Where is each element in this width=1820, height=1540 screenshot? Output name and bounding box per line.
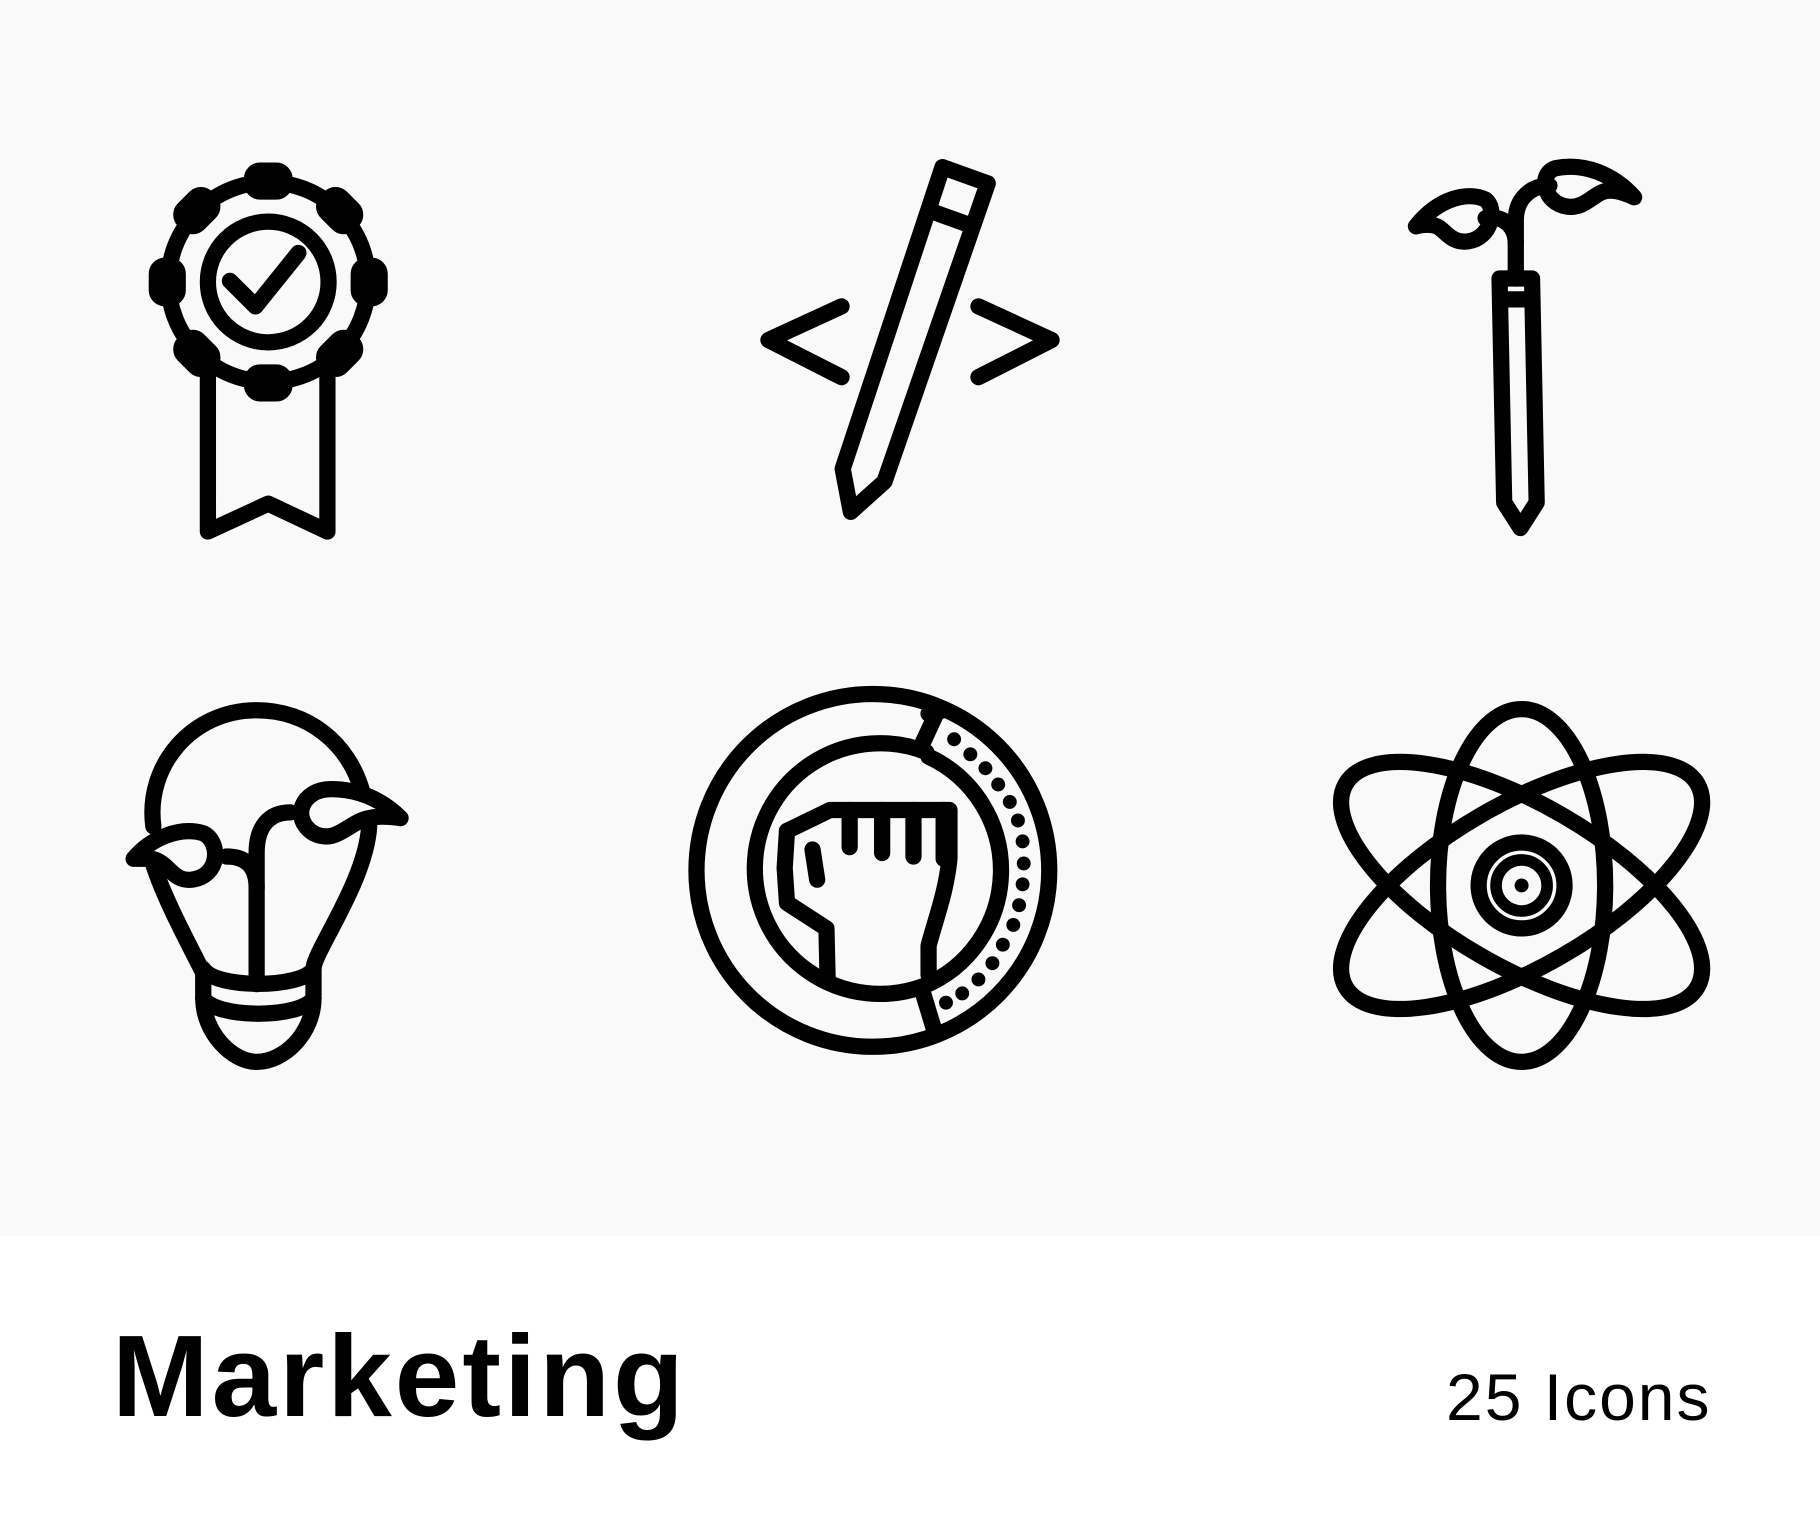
icon: light bulb with plant: [134, 710, 401, 1062]
icon: pencil with sprout: [1416, 167, 1634, 528]
icon: atom: [1305, 709, 1738, 1062]
title: Marketing: [112, 1311, 687, 1441]
icon: fist in circle: [696, 694, 1049, 1047]
icon: award badge: [156, 169, 381, 532]
icon count label: 25 Icons: [1446, 1360, 1712, 1434]
icon: code pencil: [768, 167, 1052, 512]
